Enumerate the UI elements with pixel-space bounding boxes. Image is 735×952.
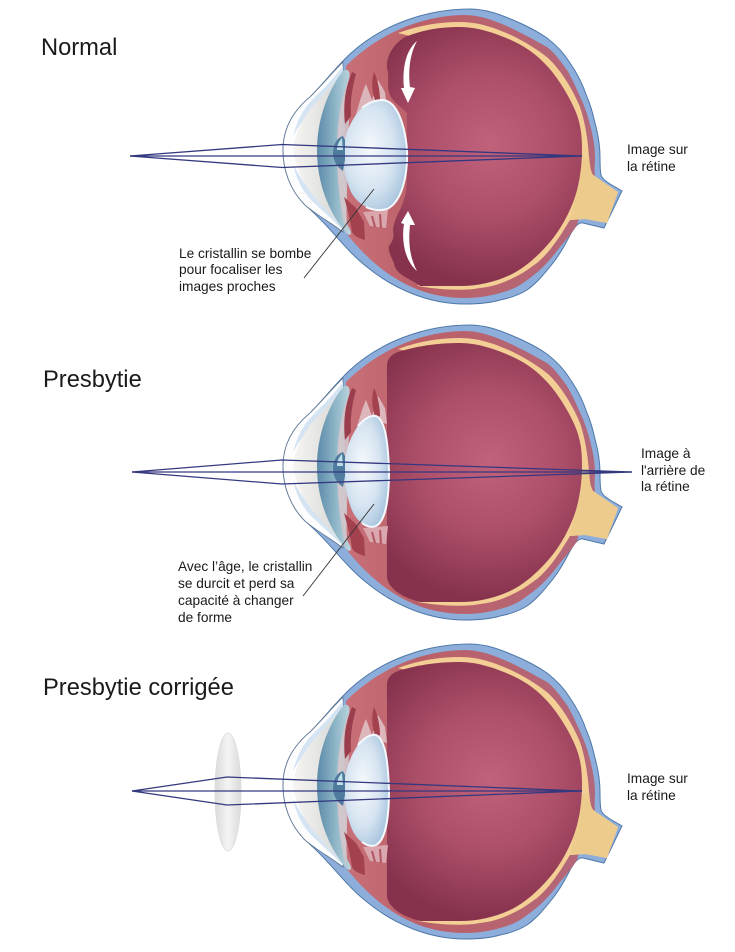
label: lens hardens with age: de forme	[178, 610, 232, 625]
light rays: presbyopia	[132, 460, 632, 484]
corrective lens	[215, 733, 241, 851]
label: lens hardens with age: Avec l’âge, le cristallin	[178, 559, 312, 574]
vitreous body	[387, 343, 582, 602]
label: image behind retina: l'arrière de	[641, 463, 705, 478]
label: lens hardens with age: se durcit et perd sa	[178, 576, 295, 591]
title: Normal: Normal	[41, 35, 117, 61]
label: image behind retina: la rétine	[641, 479, 690, 494]
eye: presbyopia, stiff lens	[283, 325, 622, 620]
label: lens hardens with age: capacité à changer	[178, 593, 294, 608]
eye: normal, bulged lens	[283, 9, 622, 304]
vitreous body	[387, 662, 582, 921]
label: image on retina, corrected: la rétine	[627, 788, 676, 803]
label: image on retina: Image sur	[627, 142, 688, 157]
title: Presbytie corrigée: Presbytie corrigée	[43, 675, 234, 701]
light rays: normal	[130, 144, 582, 168]
crystalline lens	[343, 100, 407, 210]
label: image behind retina: Image à	[641, 446, 691, 461]
arrow: top, white curved arrow	[401, 41, 417, 103]
light rays: corrected	[132, 777, 582, 805]
label: image on retina: la rétine	[627, 159, 676, 174]
leader line: normal	[304, 189, 374, 278]
label: image on retina, corrected: Image sur	[627, 771, 688, 786]
arrow: bottom, white curved arrow	[401, 211, 417, 271]
label: lens bulges: pour focaliser les	[179, 262, 283, 277]
leader line: presbyopia	[303, 504, 374, 596]
title: Presbytie: Presbytie	[43, 367, 142, 393]
crystalline lens	[344, 416, 389, 527]
crystalline lens	[344, 735, 389, 846]
label: lens bulges: Le cristallin se bombe	[179, 246, 311, 261]
eye: corrected presbyopia	[283, 644, 622, 939]
label: lens bulges: images proches	[179, 279, 276, 294]
vitreous body	[387, 27, 582, 286]
